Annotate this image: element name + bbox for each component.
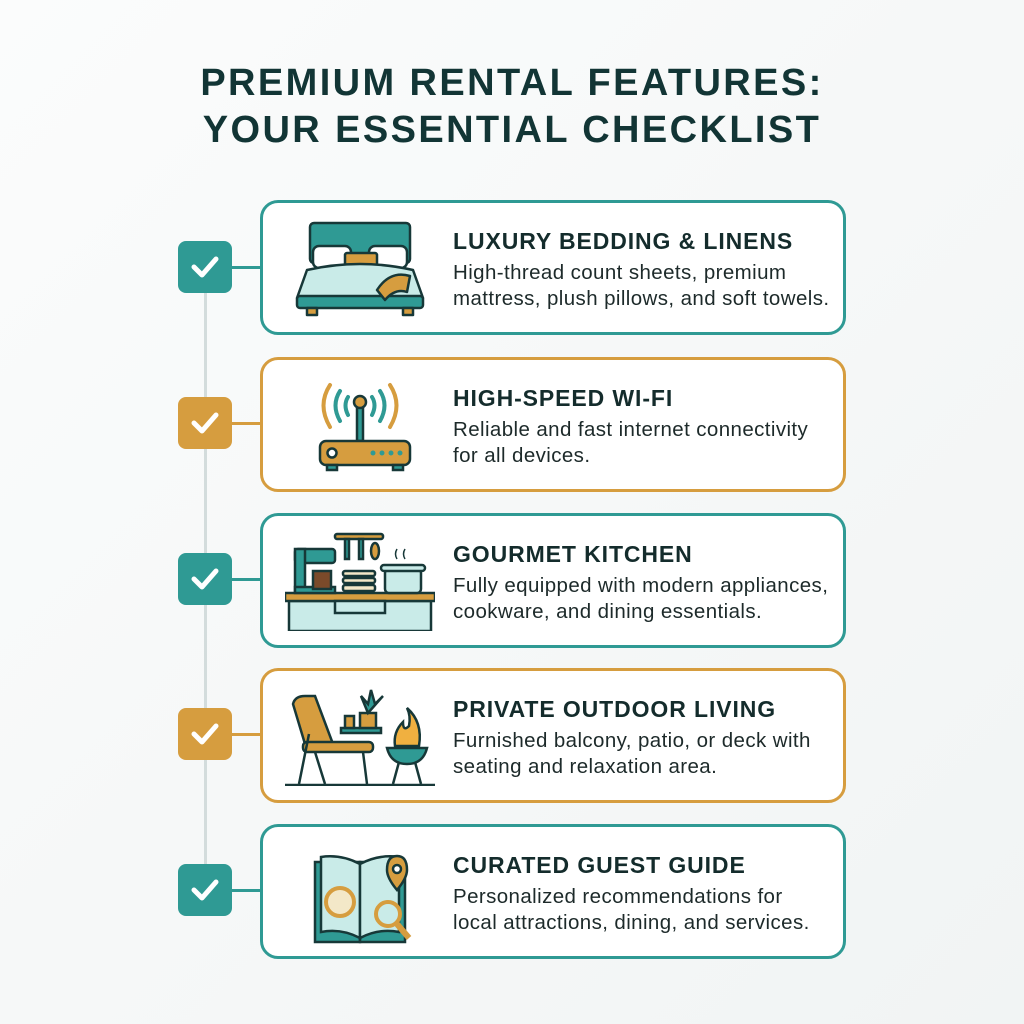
- description: Fully equipped with modern appliances,: [453, 574, 828, 597]
- checkbox 2: [178, 397, 232, 449]
- icon: patio: [285, 690, 435, 786]
- card: bedding: [260, 200, 846, 335]
- heading: GOURMET KITCHEN: [453, 541, 693, 567]
- card: outdoor: [260, 668, 846, 803]
- checkbox 5: [178, 864, 232, 916]
- checkbox 1: [178, 241, 232, 293]
- title: [200, 62, 824, 151]
- description: cookware, and dining essentials.: [453, 600, 762, 623]
- description: seating and relaxation area.: [453, 755, 717, 778]
- checkbox 4: [178, 708, 232, 760]
- description: local attractions, dining, and services.: [453, 911, 810, 934]
- description: Furnished balcony, patio, or deck with: [453, 729, 811, 752]
- title: YOUR ESSENTIAL CHECKLIST: [203, 109, 821, 151]
- icon: kitchen: [285, 532, 435, 631]
- description: [453, 885, 810, 934]
- heading: LUXURY BEDDING & LINENS: [453, 228, 793, 254]
- icon: bed: [296, 222, 424, 316]
- description: [453, 261, 829, 310]
- description: for all devices.: [453, 444, 590, 467]
- icon: guide map: [314, 854, 412, 944]
- description: mattress, plush pillows, and soft towels.: [453, 287, 829, 310]
- description: [453, 574, 828, 623]
- card: guide: [260, 824, 846, 959]
- card: wifi: [260, 357, 846, 492]
- description: High-thread count sheets, premium: [453, 261, 786, 284]
- icon: router: [318, 382, 412, 472]
- heading: HIGH-SPEED WI-FI: [453, 385, 673, 411]
- description: [453, 729, 811, 778]
- description: [453, 418, 808, 467]
- description: Reliable and fast internet connectivity: [453, 418, 808, 441]
- title: PREMIUM RENTAL FEATURES:: [200, 62, 824, 104]
- checkbox 3: [178, 553, 232, 605]
- description: Personalized recommendations for: [453, 885, 783, 908]
- heading: PRIVATE OUTDOOR LIVING: [453, 696, 776, 722]
- card: kitchen: [260, 513, 846, 648]
- heading: CURATED GUEST GUIDE: [453, 852, 746, 878]
